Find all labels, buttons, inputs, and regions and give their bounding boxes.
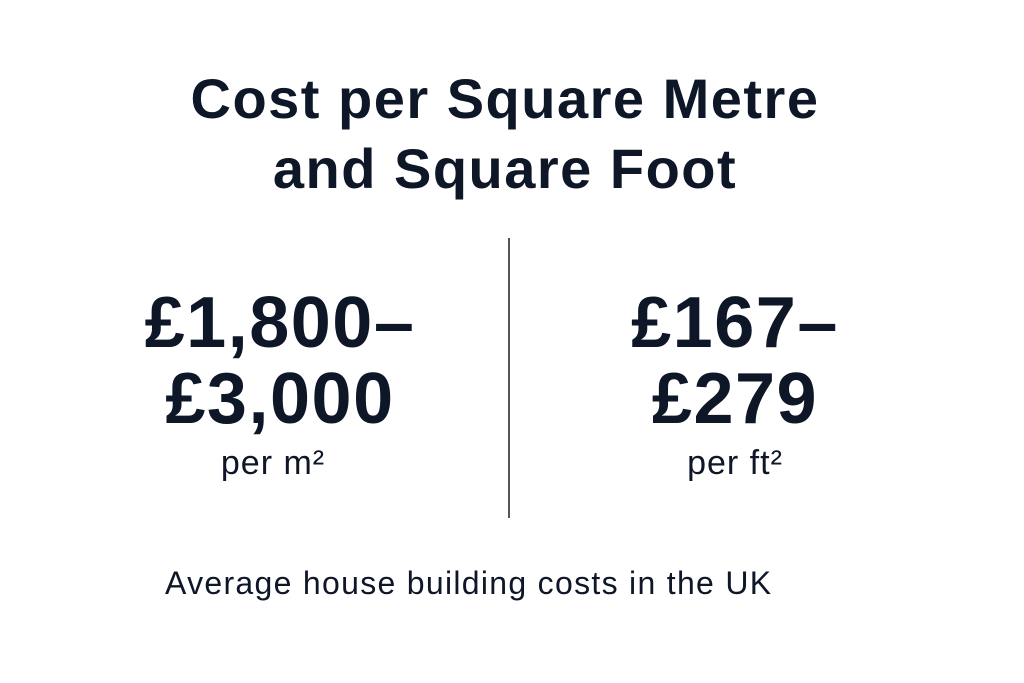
value: metre range: £1,800– — [145, 283, 415, 363]
value: foot range — [631, 283, 839, 439]
unit: per ft2: per ft² — [687, 444, 783, 482]
title: and Square Foot — [273, 137, 737, 200]
value: metre range: £3,000 — [165, 359, 395, 439]
title — [190, 67, 820, 200]
divider — [508, 238, 510, 518]
value: foot range: £279 — [652, 359, 818, 439]
title: Cost per Square Metre — [190, 67, 820, 130]
unit: per m2: per m² — [221, 444, 325, 482]
panel: per square foot — [631, 283, 839, 482]
value: metre range — [145, 283, 415, 439]
panel: per square metre — [145, 283, 415, 482]
footer caption: Average house building costs in the UK — [165, 565, 772, 601]
value: foot range: £167– — [631, 283, 839, 363]
